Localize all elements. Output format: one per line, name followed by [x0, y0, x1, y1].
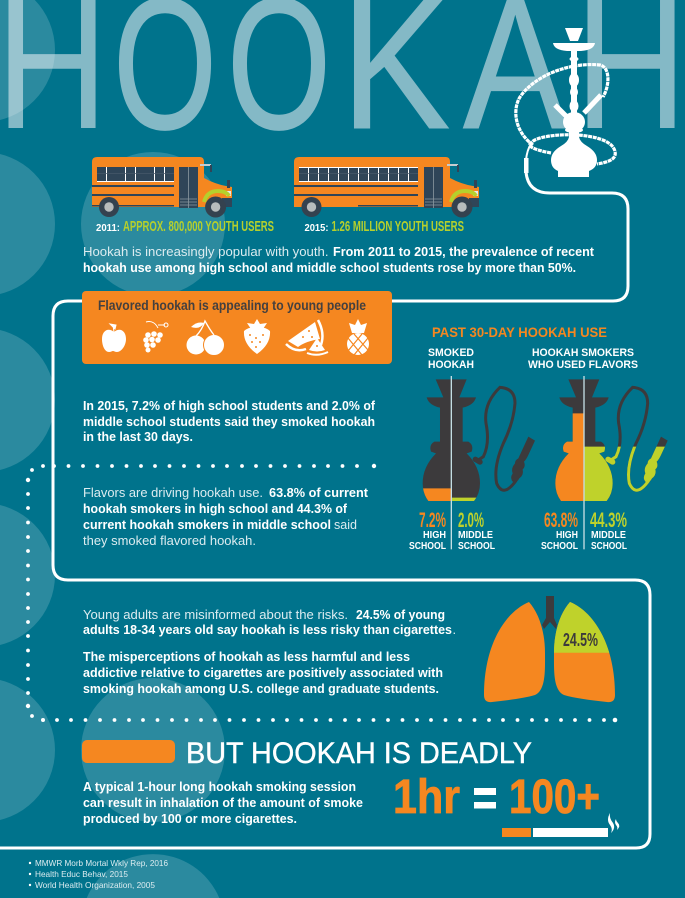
chart: flavors 63.8% / 44.3%	[555, 376, 668, 549]
bus label 2011: 2011:	[96, 222, 120, 234]
orange accent bar	[82, 740, 175, 763]
text: flavors driving use: they smoked flavored hookah.	[83, 533, 256, 548]
heading: but hookah is deadly: BUT HOOKAH IS DEADLY	[186, 737, 532, 770]
stat: 2.0% middle school: SCHOOL	[458, 541, 495, 552]
icon: strawberry	[244, 319, 270, 354]
stat: 7.2% high school	[409, 509, 446, 552]
text: 30-day smoking stat: In 2015, 7.2% of high school students and 2.0% of	[83, 398, 376, 413]
stat: 44.3% middle school: SCHOOL	[591, 541, 627, 552]
stat: 7.2% high school: 7.2%	[419, 509, 446, 532]
stat: 1hr = 100+	[393, 771, 600, 824]
sources: World Health Organization, 2005	[35, 880, 155, 890]
decorative circles	[0, 0, 225, 898]
text: flavors driving use: Flavors are driving hookah use.	[83, 485, 263, 500]
column heading: smoked hookah	[428, 347, 474, 371]
text: popularity with youth: hookah use among high school and middle school students rose by more than 50%.	[83, 260, 576, 275]
icon: pineapple	[347, 319, 369, 355]
icon: grapes	[143, 321, 168, 352]
stat: 63.8% high school	[541, 509, 578, 552]
stat: 44.3% middle school: MIDDLE	[591, 530, 626, 541]
bus 2015	[294, 157, 479, 218]
icon: lungs 24.5%: 24.5%	[563, 630, 598, 650]
banner heading: Flavored hookah is appealing to young people	[98, 298, 366, 313]
stat: 2.0% middle school: 2.0%	[458, 509, 484, 532]
text: popularity with youth: From 2011 to 2015, the prevalence of recent	[333, 244, 595, 259]
title	[0, 0, 685, 168]
icon: apple	[102, 324, 126, 352]
text: flavors driving use	[83, 485, 369, 548]
bus 2011	[92, 157, 232, 218]
text: one hour session: produced by 100 or more cigarettes.	[83, 811, 297, 826]
text: 30-day smoking stat: middle school students said they smoked hookah	[83, 414, 375, 429]
text: misinformed about risks: .	[452, 622, 456, 637]
text: misinformed about risks: 24.5% of young	[356, 607, 445, 622]
stat: 63.8% high school: SCHOOL	[541, 541, 578, 552]
text: 30-day smoking stat	[83, 398, 376, 444]
icon: lungs 24.5%	[484, 596, 615, 702]
bus label 2015	[304, 218, 464, 235]
text: one hour session	[83, 779, 363, 826]
icon: cherries	[186, 321, 224, 356]
text: flavors driving use: said	[334, 517, 357, 532]
column heading: flavor users: HOOKAH SMOKERS	[532, 347, 634, 359]
bus label 2015: 2015:	[304, 222, 328, 234]
column heading: flavor users	[528, 347, 638, 371]
text: popularity with youth	[83, 244, 595, 275]
stat: 44.3% middle school: 44.3%	[590, 509, 627, 532]
text: one hour session: A typical 1-hour long hookah smoking session	[83, 779, 356, 794]
stat: 1hr = 100+: 100+	[509, 771, 600, 824]
text: misinformed about risks: Young adults are misinformed about the risks.	[83, 607, 348, 622]
bus label 2011: APPROX. 800,000 YOUTH USERS	[123, 218, 274, 235]
icon: watermelon	[286, 320, 328, 355]
text: flavors driving use: hookah smokers in high school and 44.3% of	[83, 501, 348, 516]
dotted divider path	[26, 464, 617, 722]
icon: cigarette with smoke	[502, 813, 619, 837]
text: misinformed about risks	[83, 607, 456, 637]
stat: 7.2% high school: SCHOOL	[409, 541, 446, 552]
connecting white hose line	[0, 172, 650, 848]
stat: 63.8% high school: HIGH	[556, 530, 578, 541]
stat: 44.3% middle school	[590, 509, 627, 552]
panel: flavored hookah banner	[82, 291, 392, 364]
column heading: smoked hookah: HOOKAH	[428, 359, 474, 371]
text: misperceptions: smoking hookah among U.S. college and graduate students.	[83, 681, 439, 696]
column heading: smoked hookah: SMOKED	[428, 347, 474, 359]
stat: 7.2% high school: HIGH	[423, 530, 446, 541]
icon: white hookah	[516, 28, 615, 177]
sources: Health Educ Behav, 2015	[35, 869, 128, 879]
text: one hour session: can result in inhalation of the amount of smoke	[83, 795, 363, 810]
stat: 63.8% high school: 63.8%	[544, 509, 578, 532]
chart: hookah smoked 7.2% / 2.0%	[423, 376, 535, 549]
chart heading: PAST 30-DAY HOOKAH USE	[432, 324, 607, 340]
text: misperceptions: The misperceptions of hookah as less harmful and less	[83, 649, 410, 664]
sources: MMWR Morb Mortal Wkly Rep, 2016	[35, 858, 168, 868]
text: popularity with youth: Hookah is increasingly popular with youth.	[83, 244, 328, 259]
stat: 2.0% middle school: MIDDLE	[458, 530, 493, 541]
sources	[29, 858, 168, 890]
stat: 1hr = 100+: 1hr	[393, 771, 460, 824]
text: flavors driving use: current hookah smokers in middle school	[83, 517, 331, 532]
text: misperceptions	[83, 649, 443, 696]
column heading: flavor users: WHO USED FLAVORS	[528, 359, 638, 371]
stat: 2.0% middle school	[458, 509, 495, 552]
text: misperceptions: addictive relative to cigarettes are positively associated with	[83, 665, 443, 680]
bus label 2015: 1.26 MILLION YOUTH USERS	[332, 218, 464, 235]
text: misinformed about risks: adults 18-34 years old say hookah is less risky than cigarettes	[83, 622, 452, 637]
text: flavors driving use: 63.8% of current	[269, 485, 369, 500]
text: 30-day smoking stat: in the last 30 days.	[83, 429, 193, 444]
bus label 2011	[96, 218, 274, 235]
